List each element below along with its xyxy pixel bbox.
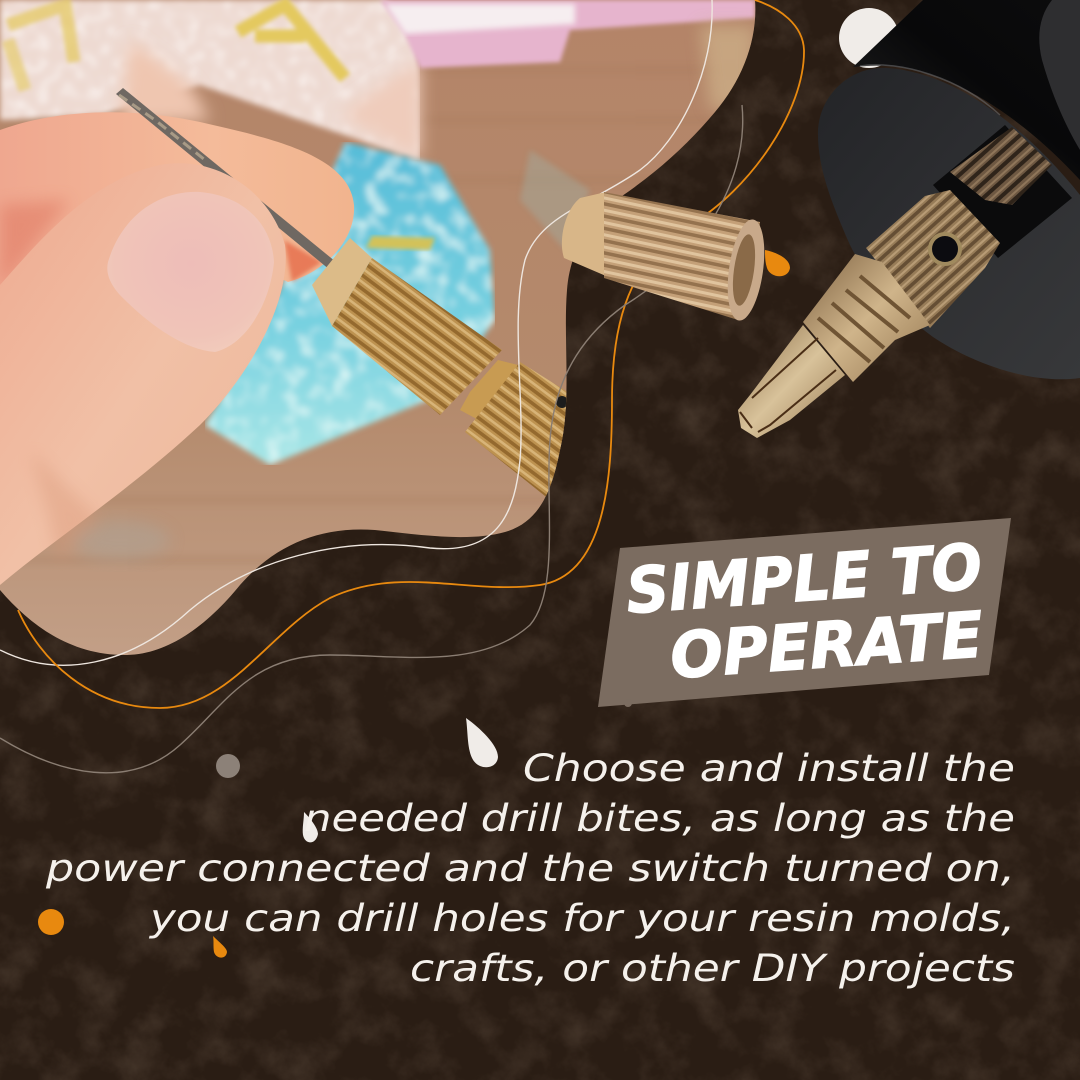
description paragraph: Choose and install the [523, 747, 1015, 790]
thread: orange line [18, 0, 804, 708]
rear knurled shaft [950, 127, 1052, 205]
rim highlight [860, 65, 1000, 115]
wooden table backdrop [0, 0, 780, 670]
description paragraph [45, 747, 1015, 990]
description paragraph: needed drill bites, as long as the [304, 797, 1015, 840]
collet tip [738, 325, 845, 438]
thumb crease shading [36, 466, 92, 546]
photo panel: hand holding mini drill over resin dice [0, 0, 780, 670]
brass collet attached to tool [738, 125, 1072, 438]
blurred pink resin dice at top [0, 0, 755, 160]
front face [818, 68, 1080, 379]
description paragraph: you can drill holes for your resin molds, [149, 897, 1015, 940]
blurred turquoise resin die [205, 142, 590, 465]
loose brass chuck sleeve [562, 192, 770, 323]
title banner [598, 518, 1011, 707]
white decorative dot, top right [839, 8, 899, 68]
drill bit [116, 88, 336, 270]
black rotary tool body [818, 0, 1080, 379]
description paragraph: power connected and the switch turned on, [45, 847, 1015, 890]
red shadow between fingers [0, 197, 66, 282]
index finger [0, 112, 354, 290]
black collar [933, 125, 1072, 258]
front knurled shaft [866, 190, 1000, 328]
orange drop near chuck [765, 250, 790, 276]
finger shadow beside bit [284, 240, 322, 282]
thumbnail [107, 192, 274, 352]
title line 1: SIMPLE TO [624, 530, 984, 628]
decorative drops and dots [38, 718, 498, 958]
thread: grey line [0, 105, 743, 773]
thread: white line [0, 0, 712, 665]
rear lighter cap [1039, 0, 1080, 150]
threaded section [803, 254, 930, 382]
set screw [928, 232, 962, 266]
title line 2: OPERATE [668, 598, 985, 693]
cylinder [853, 0, 1080, 180]
description paragraph: crafts, or other DIY projects [410, 947, 1015, 990]
brass chuck held in hand [312, 238, 580, 500]
thumb and palm [0, 163, 286, 585]
